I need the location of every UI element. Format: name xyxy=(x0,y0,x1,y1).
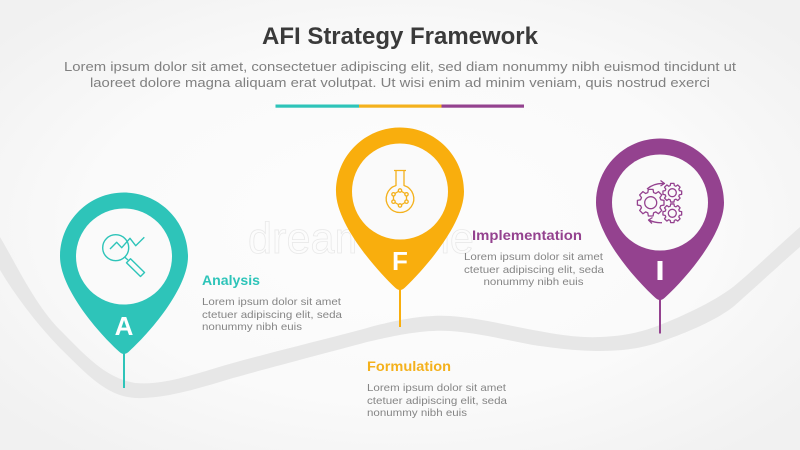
text block: Implementation: Lorem ipsum dolor sit amet xyxy=(464,251,603,263)
text block: Implementation xyxy=(464,227,604,288)
subtitle text xyxy=(64,59,736,90)
text block: Implementation: ctetuer adipiscing elit, seda xyxy=(464,264,604,276)
pin I: Implementation xyxy=(596,138,724,334)
pin A: Analysis xyxy=(60,192,188,388)
text block: Formulation xyxy=(367,358,507,419)
text block: Analysis: Lorem ipsum dolor sit amet xyxy=(202,296,341,308)
pin F: Formulation xyxy=(336,128,464,327)
text block: Analysis xyxy=(202,272,342,333)
subtitle text: Lorem ipsum dolor sit amet, consectetuer adipiscing elit, sed diam nonummy nibh euismod tincidunt ut xyxy=(64,59,736,74)
icon: gears with arrows xyxy=(637,180,682,224)
text block: Implementation: Implementation xyxy=(472,227,582,243)
letter I xyxy=(658,261,662,280)
letter F: F xyxy=(392,246,408,276)
subtitle text: laoreet dolore magna aliquam erat volutpat. Ut wisi enim ad minim veniam, quis nostrud exerci xyxy=(90,75,710,90)
text block: Analysis: Analysis xyxy=(202,272,260,288)
tricolour divider bar xyxy=(276,104,524,108)
icon: magnifier over chart xyxy=(103,235,144,276)
text block: Implementation: nonummy nibh euis xyxy=(484,276,584,288)
text block: Formulation: nonummy nibh euis xyxy=(367,407,467,419)
text block: Formulation: Lorem ipsum dolor sit amet xyxy=(367,382,506,394)
text block: Formulation: ctetuer adipiscing elit, seda xyxy=(367,395,507,407)
text block: Analysis: nonummy nibh euis xyxy=(202,321,302,333)
watermark: dreamstime xyxy=(248,214,474,263)
text block: Formulation: Formulation xyxy=(367,358,451,374)
text block: Analysis: ctetuer adipiscing elit, seda xyxy=(202,309,342,321)
winding road ribbon xyxy=(0,227,800,398)
letter A: A xyxy=(115,311,134,341)
title: AFI Strategy Framework xyxy=(262,23,538,50)
icon: flask xyxy=(386,170,414,213)
